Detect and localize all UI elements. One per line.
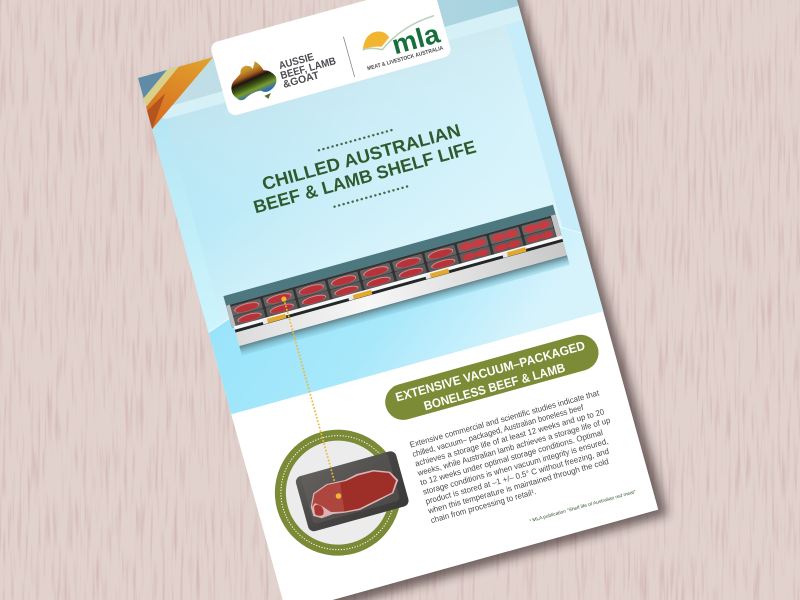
ribbon corner graphic [138,57,227,129]
footnote: ¹ MLA publication "Shelf life of Australian red meat" [529,489,637,524]
title: CHILLED AUSTRALIAN [260,120,463,194]
logo: Meat & Livestock Australia: mla [389,18,444,60]
page drop shadow [148,0,668,600]
extensive vacuum-packaged heading pill: BONELESS BEEF & LAMB [422,361,567,413]
body text block: storage conditions is when vacuum integrity is ensured, [422,437,609,497]
icon: Aussie map logo [226,57,281,108]
extensive vacuum-packaged heading pill [381,331,603,424]
panel: logo tab [209,0,452,117]
connector end dot [336,493,341,499]
title [244,110,481,228]
logo wordmark: Aussie Beef, Lamb & Goat: BEEF, LAMB [279,55,338,82]
extensive vacuum-packaged heading pill: EXTENSIVE VACUUM–PACKAGED [394,339,587,404]
icon: vacuum-packed tray [295,450,410,533]
body text block: achieves a storage life of at least 12 weeks and up to 20 [414,407,606,468]
body text block: chain from processing to retail¹. [430,487,537,525]
body text block: weeks, while Australian lamb achieves a storage life of up [416,416,612,478]
body text block: product is stored at –1 +/– 0.5° C without freezing, and [425,447,610,506]
body text block: to 12 weeks under optimal storage conditions. Optimal [419,428,604,487]
title: BEEF & LAMB SHELF LIFE [251,137,478,217]
body text block: chilled, vacuum– packaged, Australian boneless beef [411,403,585,459]
dotted connector line [284,299,338,496]
logo: Meat & Livestock Australia [358,15,445,72]
chart: refrigerated meat shelf [223,205,570,356]
body text block [408,387,625,525]
panel: chilled cabinet sky [138,0,603,414]
icon: steak on tray [311,470,398,518]
logo wordmark: Aussie Beef, Lamb & Goat [276,46,340,91]
logo wordmark: Aussie Beef, Lamb & Goat: &GOAT [282,69,321,91]
shelf price tags [262,247,526,324]
logo: Meat & Livestock Australia: MEAT & LIVESTOCK AUSTRALIA [367,45,444,72]
body text block: when this temperature is maintained through the cold [426,457,610,516]
body text block: Extensive commercial and scientific studies indicate that [409,388,601,449]
brochure page [134,0,658,600]
callout: green circle with vacuum pack [260,414,419,570]
connector start dot [281,296,287,302]
page white background [138,0,658,600]
logo wordmark: Aussie Beef, Lamb & Goat: AUSSIE [277,51,315,72]
meat trays row [230,218,556,326]
